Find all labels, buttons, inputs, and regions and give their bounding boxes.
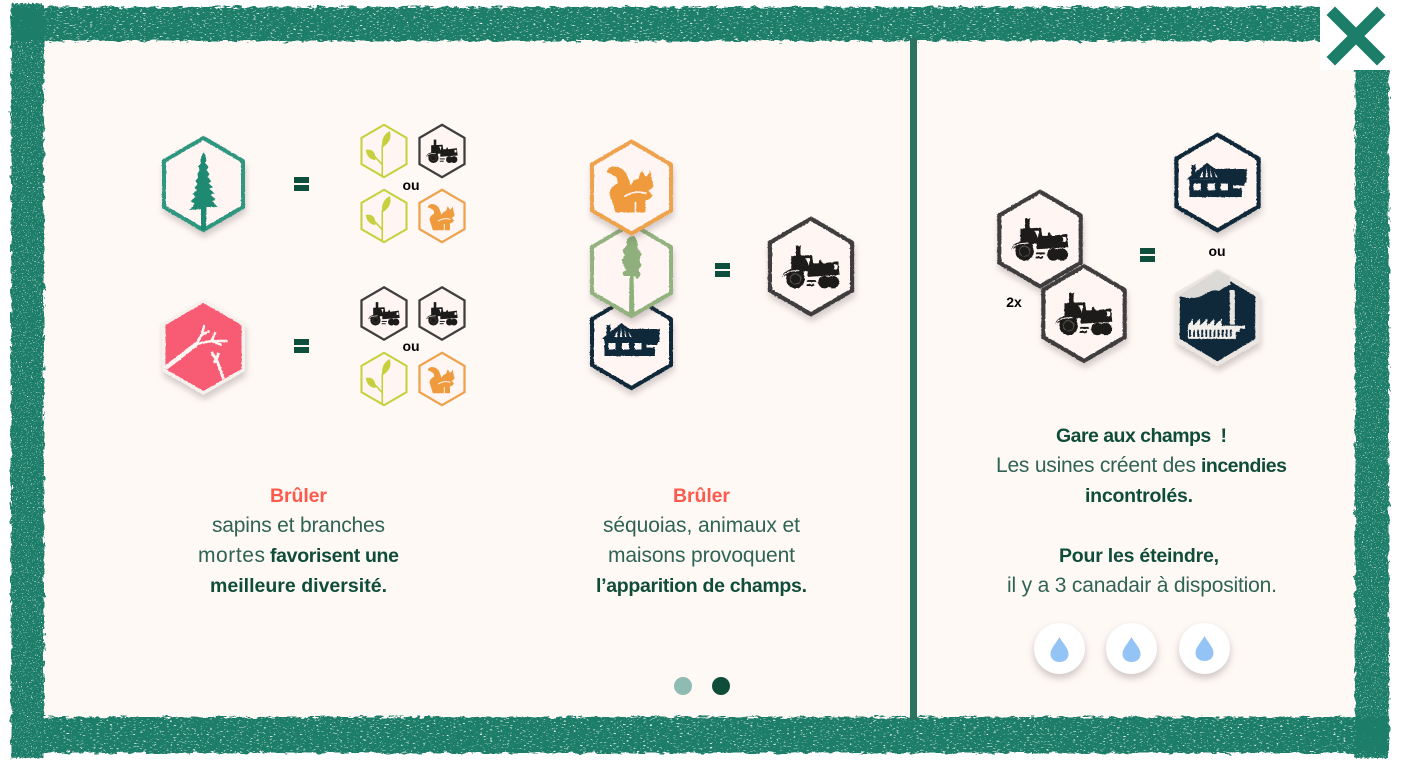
label: ou: ou [402, 177, 420, 193]
icon: squirrel hexagon [592, 142, 671, 234]
icon: squirrel hexagon [419, 353, 465, 405]
icon: tractor hexagon [419, 125, 465, 177]
equals sign [294, 339, 309, 353]
icon: sequoia hexagon [592, 224, 671, 316]
text block: burn firs and branches: mortes [198, 544, 265, 567]
icon: water drop [1106, 623, 1157, 674]
text block: burn firs and branches: Brûler [270, 485, 327, 507]
icon: sprout hexagon [361, 353, 407, 405]
text block: burn sequoias animals houses [596, 485, 807, 597]
water drop tokens [1034, 623, 1230, 674]
text block: burn sequoias animals houses: maisons provoquent [608, 544, 795, 567]
equals sign [715, 263, 730, 277]
equals sign [294, 177, 309, 191]
text block: burn sequoias animals houses: l’apparition de champs. [596, 575, 807, 597]
icon: house hexagon [1176, 135, 1259, 230]
icon: squirrel hexagon [419, 190, 465, 242]
text block: burn sequoias animals houses: séquoias, animaux et [603, 514, 800, 537]
text block: burn sequoias animals houses: Brûler [673, 485, 730, 507]
icon: tractor hexagon [1043, 266, 1125, 361]
text block: burn firs and branches: favorisent une [270, 545, 399, 567]
icon: sprout hexagon [361, 125, 407, 177]
text block: burn firs and branches [198, 485, 399, 597]
equals sign [1140, 248, 1155, 262]
text block: beware of fields [996, 425, 1287, 597]
pagination dots [674, 677, 730, 695]
text block: burn firs and branches: meilleure diversité. [210, 575, 387, 597]
icon: tractor hexagon [361, 287, 407, 340]
rule 1: fir tree equation [164, 125, 465, 242]
label: ou: ou [402, 338, 420, 354]
label: ou: ou [1208, 243, 1226, 259]
icon: house hexagon [592, 296, 671, 388]
icon: tractor hexagon [999, 192, 1081, 286]
text block: beware of fields: Gare aux champs ! [1056, 425, 1227, 447]
text block: burn firs and branches: sapins et branches [212, 514, 385, 537]
icon: factory hexagon [1175, 269, 1260, 366]
icon: sprout hexagon [361, 190, 407, 242]
rule 4: fields to house or factory [999, 135, 1260, 366]
icon: dead branches hexagon [162, 299, 245, 395]
text block: beware of fields: Les usines créent des [996, 454, 1196, 477]
icon: water drop [1034, 623, 1085, 674]
icon: fir tree hexagon [164, 138, 243, 230]
icon: tractor hexagon result [770, 219, 852, 314]
rule 2: dead branches equation [162, 287, 465, 405]
text block: beware of fields: il y a 3 canadair à disposition. [1007, 574, 1277, 597]
icon: tractor hexagon [419, 287, 465, 340]
rule 3: field equation [592, 142, 852, 388]
close button [1320, 0, 1390, 70]
icon: water drop [1179, 623, 1230, 674]
panel divider [910, 38, 917, 720]
text block: beware of fields: incendies [1201, 455, 1287, 477]
text block: beware of fields: Pour les éteindre, [1059, 545, 1219, 567]
label: 2x: 2x [1006, 294, 1022, 310]
text block: beware of fields: incontrolés. [1085, 485, 1193, 507]
